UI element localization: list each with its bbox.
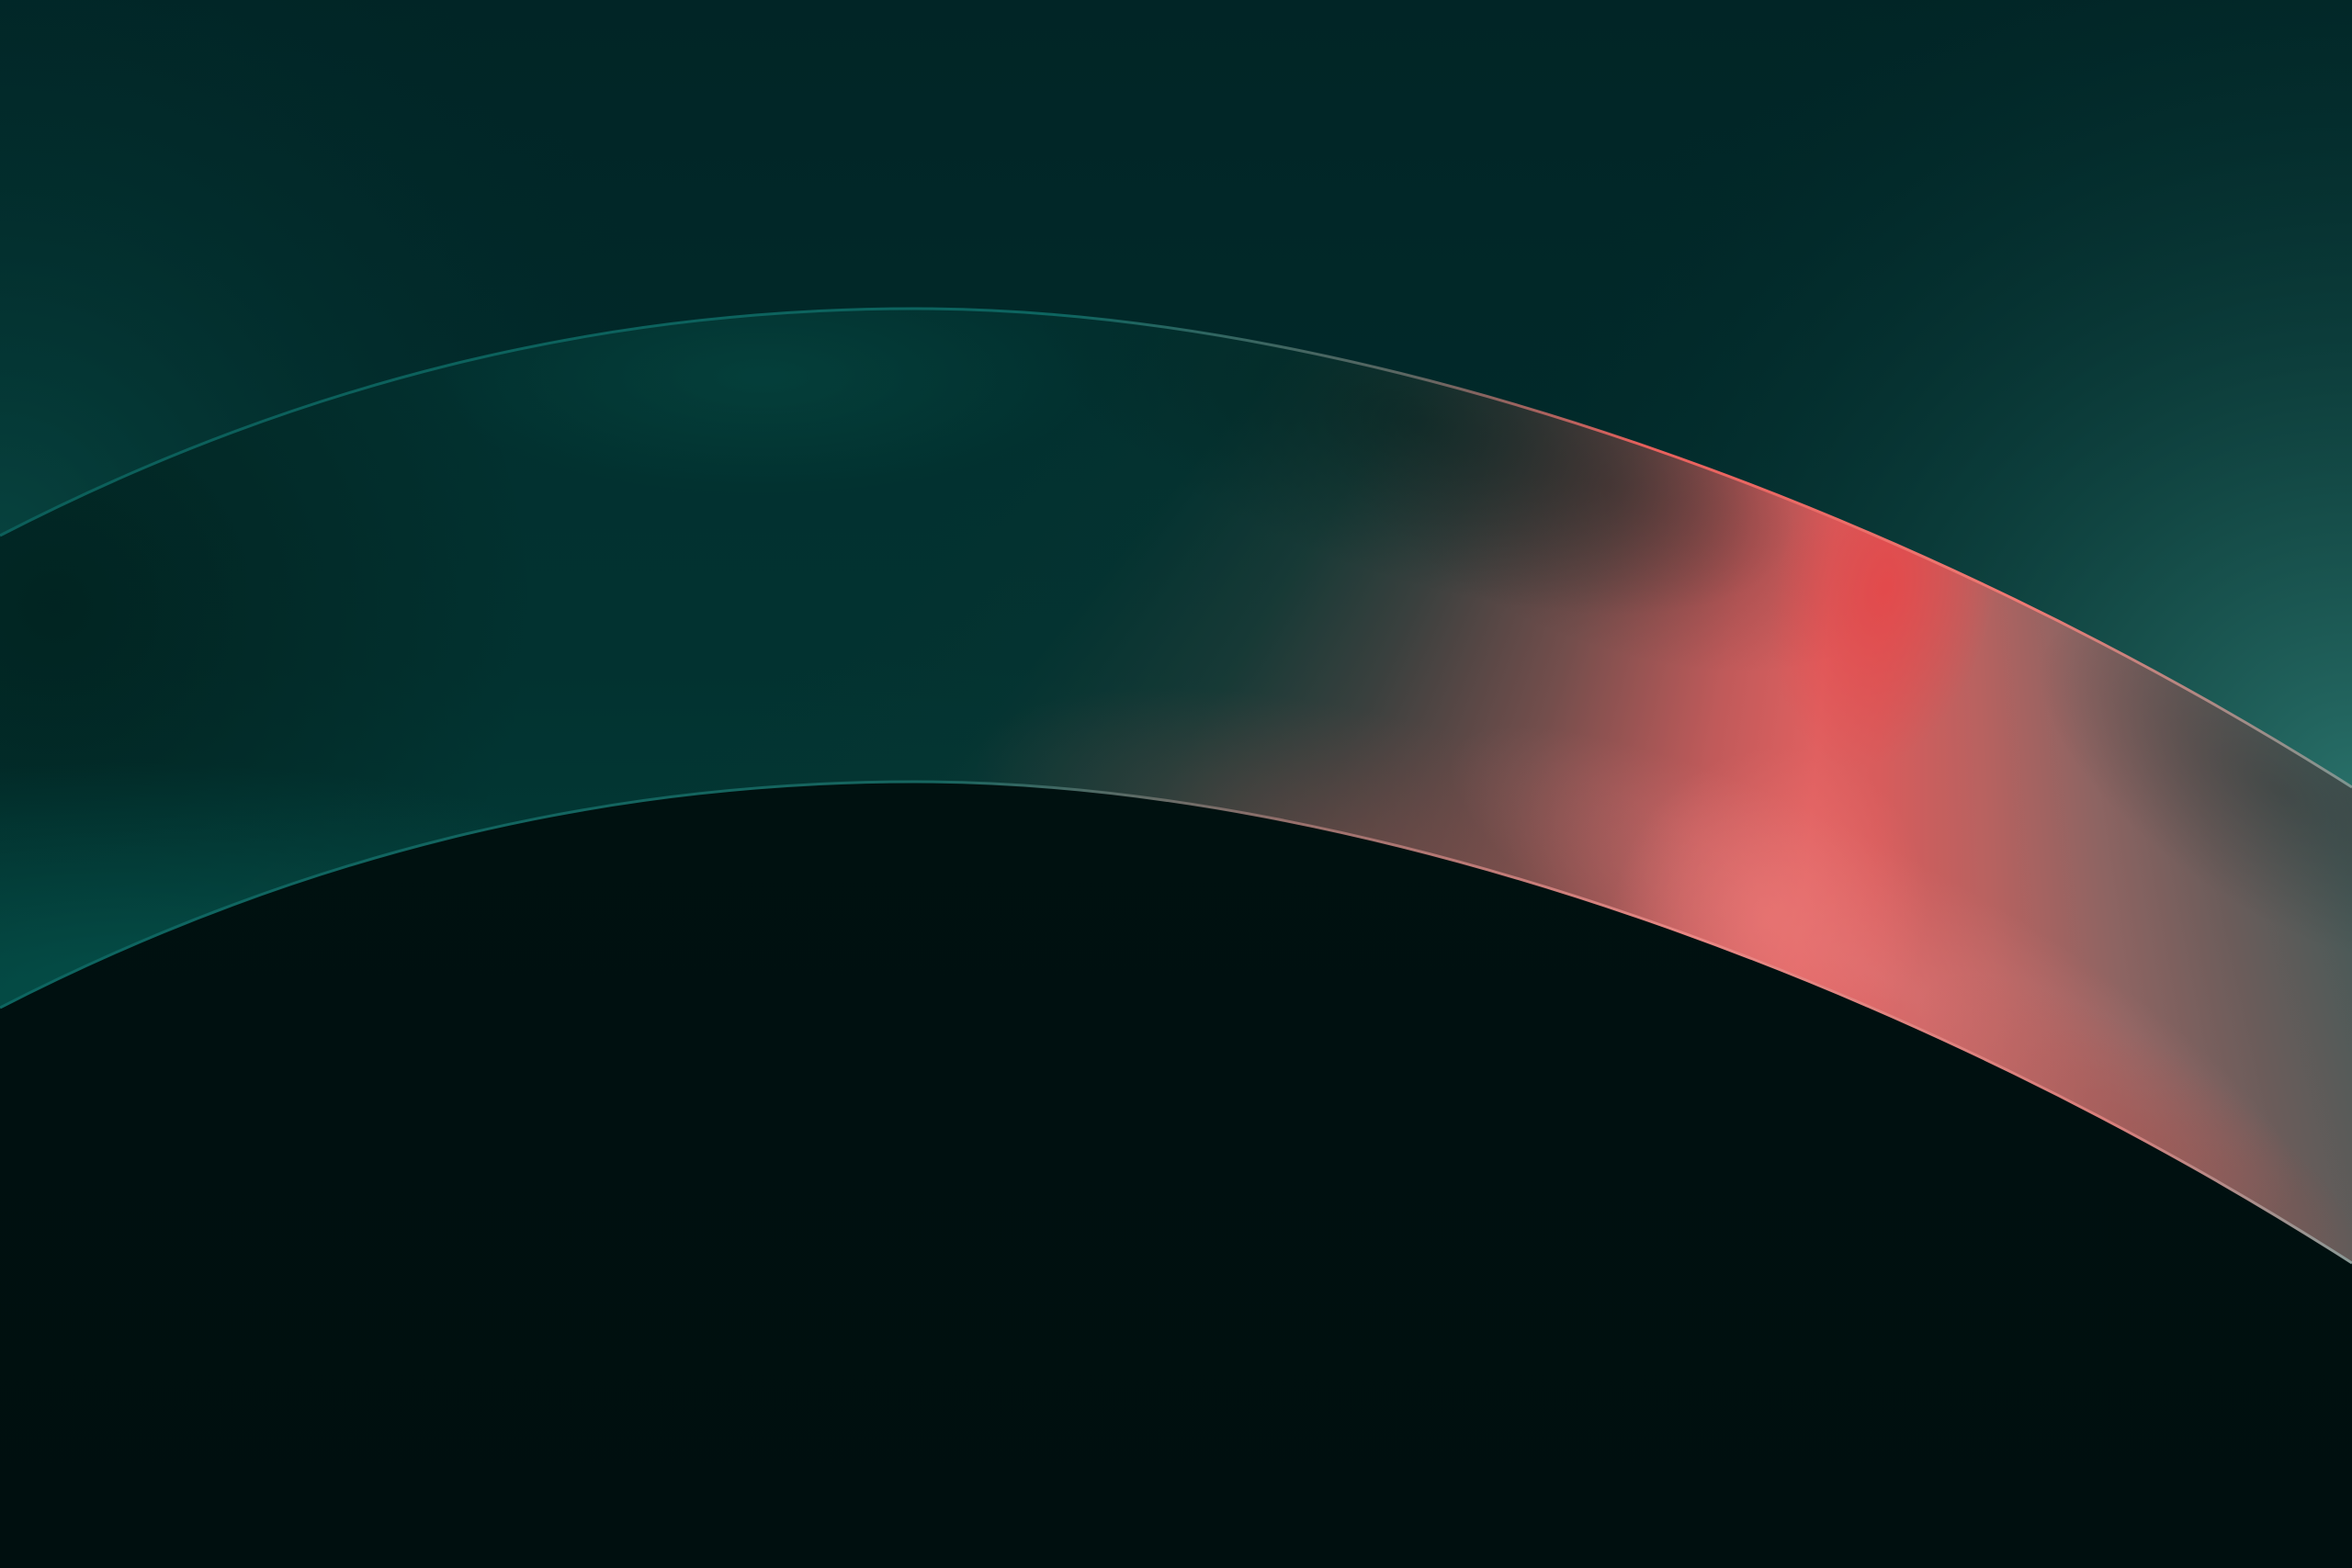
top edge shading — [1324, 364, 2352, 884]
conic colour fan — [1015, 369, 2352, 1262]
teal highlight near crest — [621, 324, 904, 428]
red core — [1821, 525, 1974, 691]
arc band — [0, 310, 2352, 1262]
top arc edge — [0, 309, 2352, 787]
pink core — [1646, 829, 1792, 964]
bottom edge glow — [1035, 715, 2291, 1216]
teal glow lower left — [0, 824, 361, 1007]
left shadow — [0, 456, 265, 827]
bottom arc edge — [0, 782, 2352, 1263]
lower dark shape — [0, 782, 2352, 1568]
